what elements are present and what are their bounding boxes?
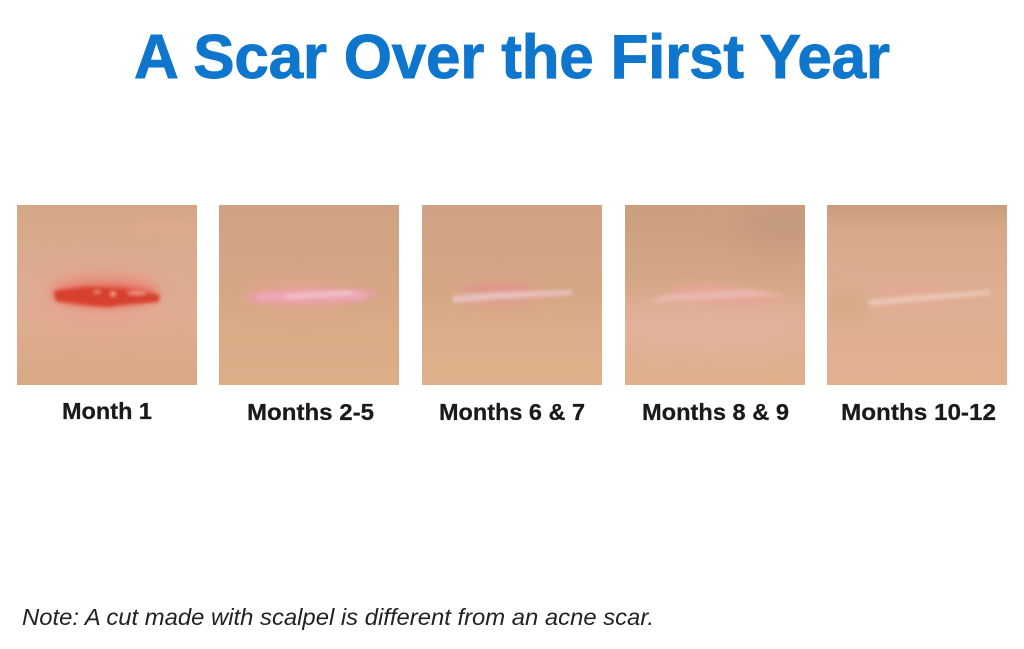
label: months 6 and 7: Months 6 & 7 <box>439 399 585 425</box>
label: months 2-5: Months 2-5 <box>247 399 374 425</box>
scar: months 6-7 line <box>452 284 572 305</box>
label: months 10-12: Months 10-12 <box>841 399 996 425</box>
label: month 1: Month 1 <box>62 398 152 424</box>
panel: months 2-5 <box>219 205 399 385</box>
scar: months 8-9 line <box>652 283 780 302</box>
scar: months 2-5 pink line <box>240 289 378 305</box>
scar: months 10-12 faint line <box>868 287 990 307</box>
panel: months 8 and 9 <box>625 205 805 385</box>
label: months 8 and 9: Months 8 & 9 <box>642 399 789 425</box>
panel: months 6 and 7 <box>422 205 602 385</box>
note: Note: A cut made with scalpel is different from an acne scar. <box>22 604 654 630</box>
title: A Scar Over the First Year <box>134 23 890 92</box>
panel: month 1 <box>17 205 197 385</box>
panel: months 10-12 <box>827 205 1007 385</box>
scar: month 1 wound <box>50 275 160 309</box>
